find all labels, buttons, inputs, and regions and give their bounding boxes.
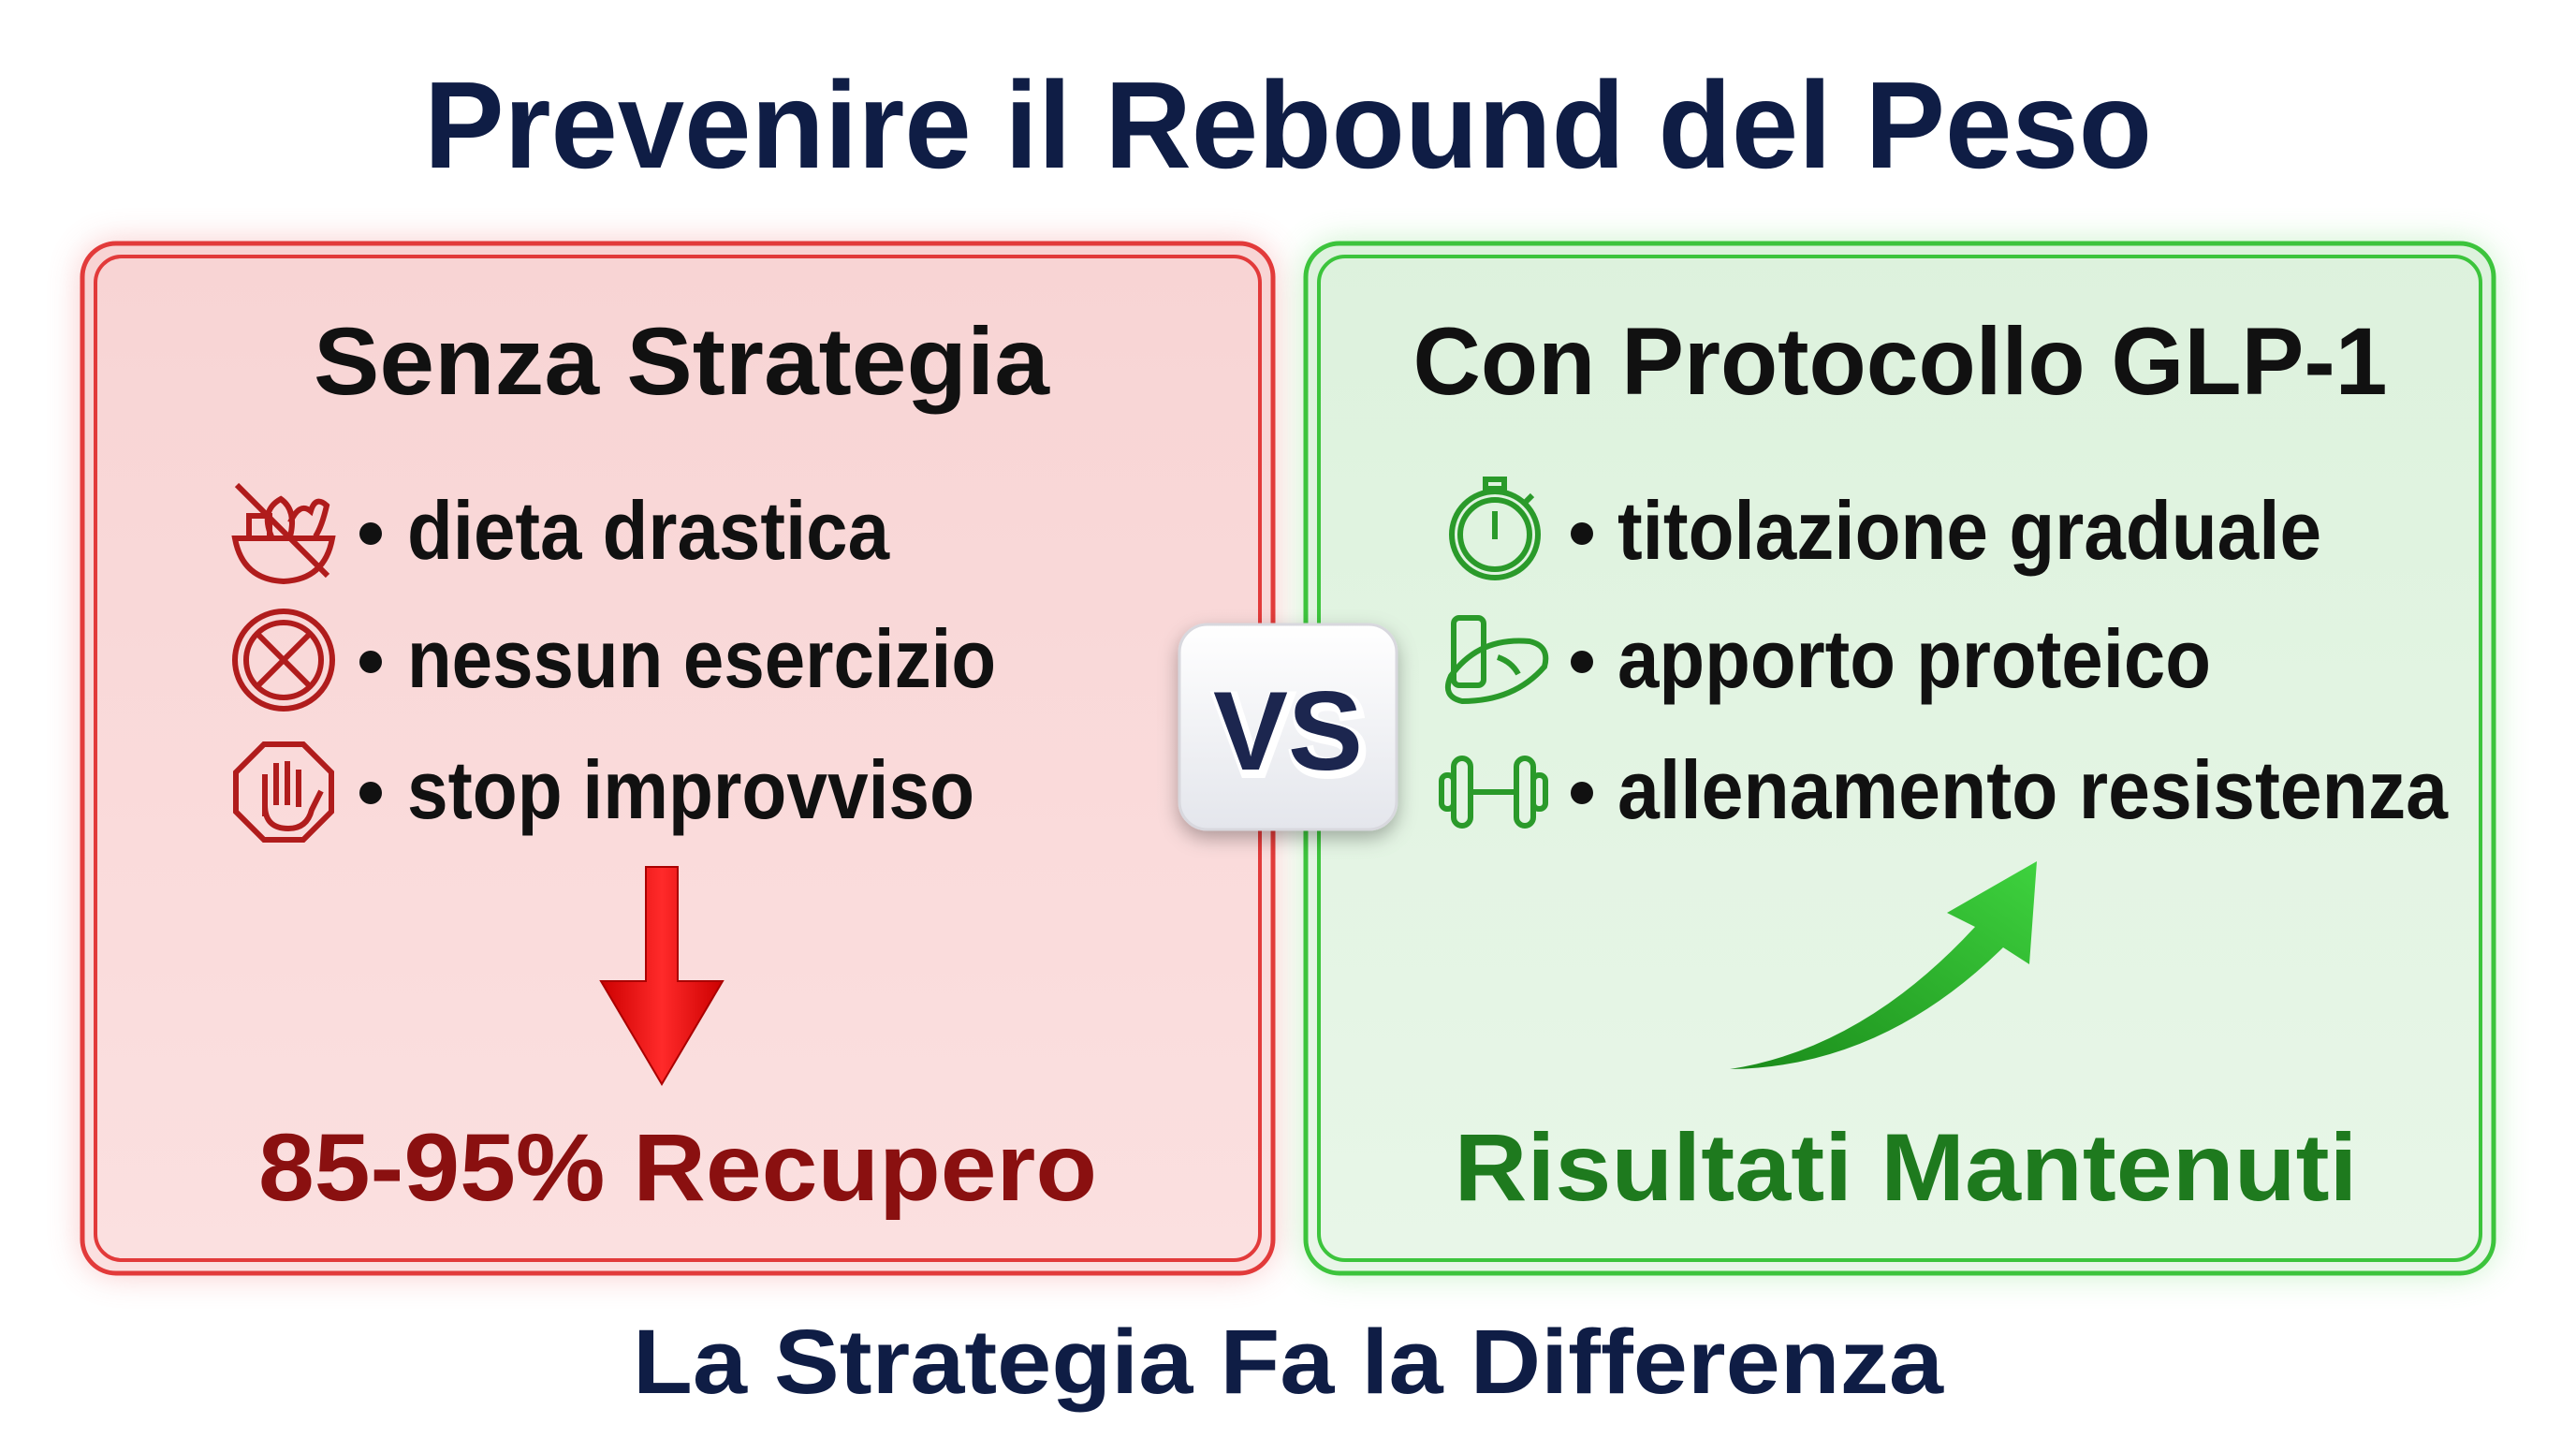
list: senza strategia: [359, 484, 996, 836]
list: senza strategia: nessun esercizio: [407, 612, 996, 705]
list: con protocollo: titolazione graduale: [1617, 484, 2321, 577]
panel: senza strategia: [82, 243, 1273, 1273]
heading: con protocollo: Con Protocollo GLP-1: [1413, 308, 2387, 415]
result: mantenuti: Risultati Mantenuti: [1455, 1114, 2357, 1221]
list: senza strategia: dieta drastica: [407, 484, 890, 577]
heading: senza strategia: Senza Strategia: [314, 308, 1050, 415]
list: con protocollo: apporto proteico: [1617, 612, 2211, 705]
footer tagline: La Strategia Fa la Differenza: [633, 1311, 1944, 1413]
icon: protein: [1448, 618, 1545, 701]
arrow: down red: [601, 867, 723, 1084]
icon: stop hand: [236, 744, 331, 840]
icon: no exercise: [235, 611, 332, 709]
list: con protocollo: allenamento resistenza: [1617, 743, 2449, 836]
icon: no salad: [235, 485, 332, 581]
list: con protocollo: [1571, 484, 2449, 836]
list: senza strategia: stop improvviso: [407, 743, 974, 836]
panel: con protocollo: [1306, 243, 2494, 1273]
vs badge: VS: [1213, 668, 1363, 794]
title: Prevenire il Rebound del Peso: [424, 56, 2152, 194]
result: recupero: 85-95% Recupero: [258, 1114, 1097, 1221]
arrow: up green: [1730, 861, 2037, 1069]
icon: stopwatch: [1452, 479, 1538, 578]
vs badge: VS: [1216, 672, 1366, 798]
icon: dumbbell: [1442, 758, 1545, 826]
vs badge: [1179, 624, 1397, 829]
